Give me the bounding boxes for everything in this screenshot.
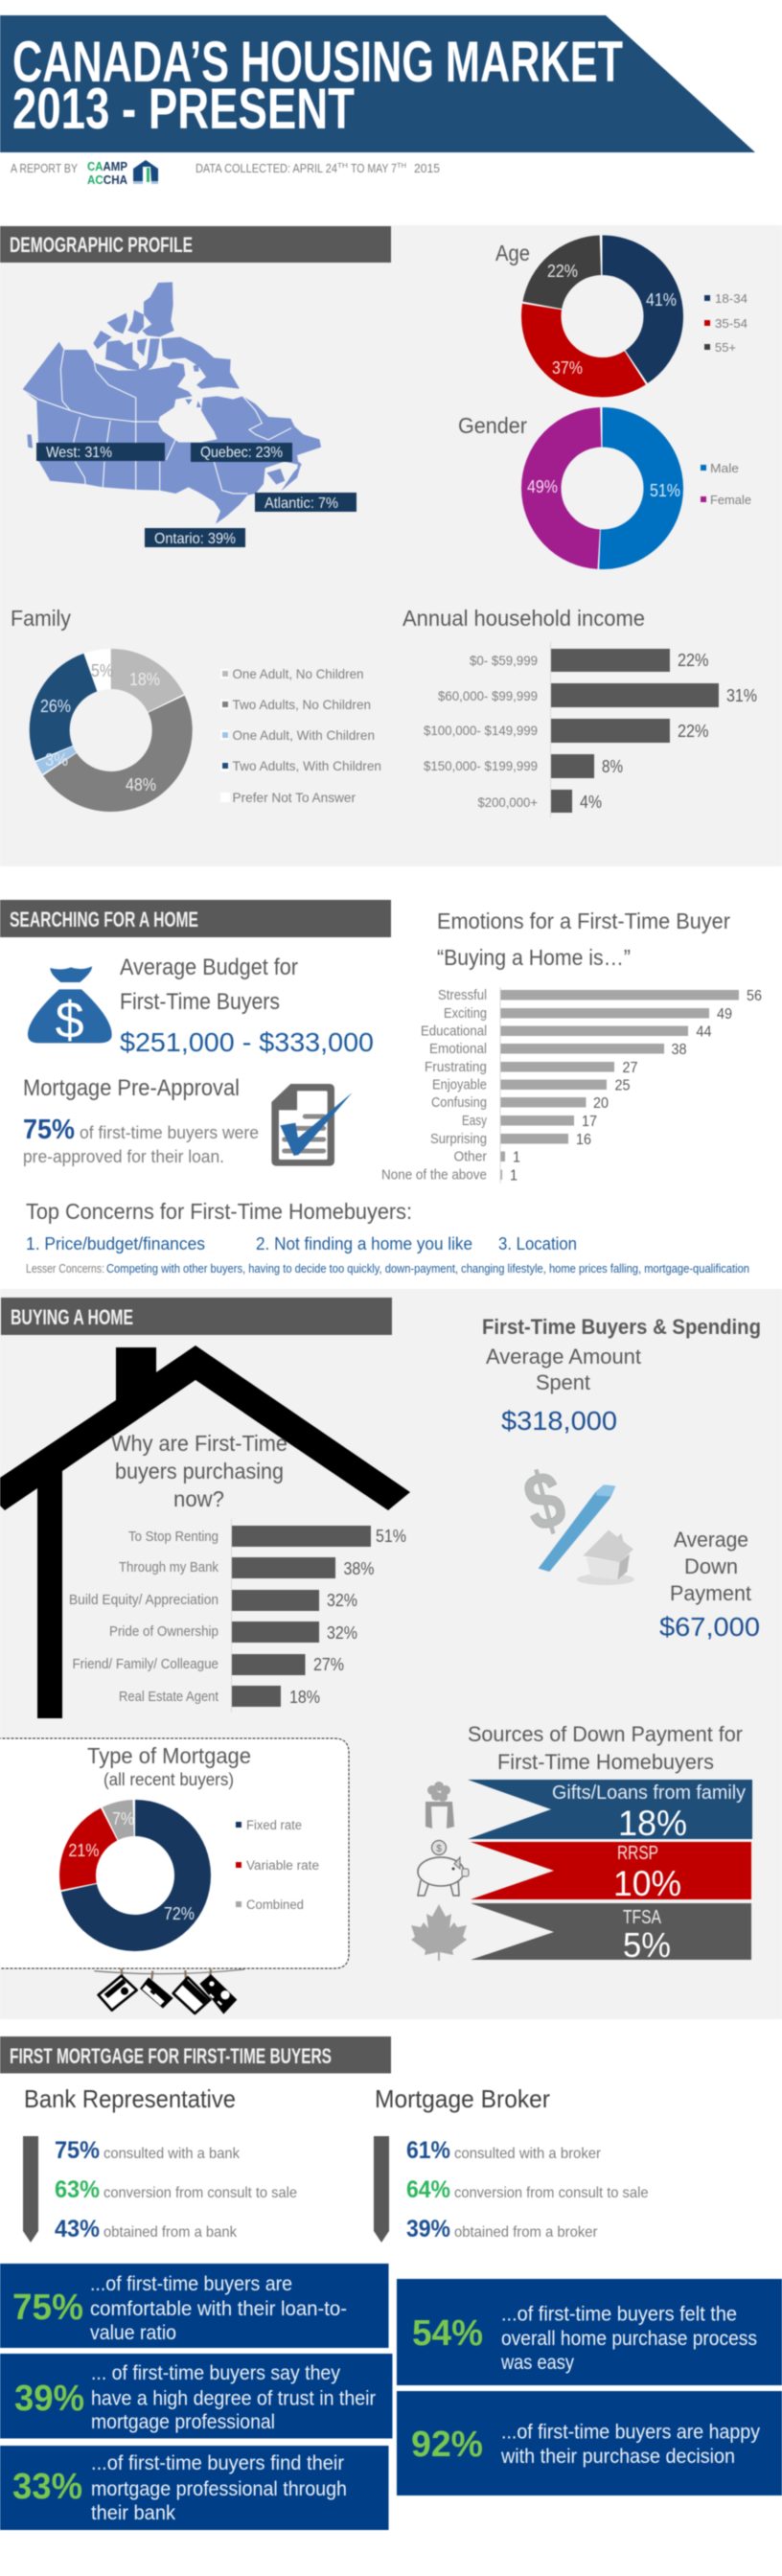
heading: searching for a home: SEARCHING FOR A HOME [10,908,198,932]
emotions bar chart: None of the above [381,1167,487,1183]
heading: emotions: “Buying a Home is…” [437,945,631,970]
text: why are first-time buyers purchasing now [111,1431,288,1511]
callout: 75% comfortable: value ratio [90,2322,176,2344]
arrow: broker funnel [374,2136,389,2242]
icon: money bag [28,966,112,1049]
ribbon: RRSP: RRSP [617,1843,658,1864]
emotions bar chart [381,987,762,1184]
income bar chart: $200,000+ [477,794,538,810]
mortgage legend: Combined [246,1898,304,1912]
callout: 54% easy process: overall home purchase process [501,2328,757,2350]
text: first-time buyers and spending: Average Amount [486,1345,641,1368]
report credit line: TO MAY 7 [351,161,397,175]
title: 2013 - PRESENT [12,77,355,141]
icon: dollar percent house: $ [515,1453,574,1550]
mortgage legend [236,1818,319,1912]
family chart: 26% [40,697,71,716]
text: average down payment: Payment [670,1581,751,1605]
reasons bar chart: 18% [289,1688,320,1707]
heading: searching for a home [0,900,391,937]
income bar chart: 4% [580,793,602,812]
gender chart [458,413,751,549]
emotions bar chart: 17 [582,1114,597,1130]
callout: 54% easy process: ...of first-time buyers felt the [501,2304,737,2325]
label: West: West: 31% [46,445,112,461]
mortgage donut chart: 21% [69,1841,100,1860]
callout: 39% trust: 39% [14,2379,84,2419]
callout: 92% happy: 92% [411,2425,483,2465]
age chart [495,241,748,378]
text: top concerns: Lesser Concerns: [26,1262,104,1276]
column: mortgage broker [374,2084,649,2242]
gender chart: 49% [527,477,558,496]
reasons bar chart: Through my Bank [119,1560,219,1576]
emotions bar chart: Other [454,1150,487,1165]
text: first-time buyers and spending: Spent [536,1370,590,1394]
income bar chart: 22% [678,722,709,741]
text: mortgage pre-approval: 75% [23,1115,75,1145]
emotions bar chart: Emotional [429,1042,487,1057]
emotions bar chart: Easy [462,1114,488,1129]
reasons bar chart: 51% [376,1527,406,1546]
title [12,30,623,141]
family chart: 48% [126,775,156,794]
text: top concerns: 1. Price/budget/finances [26,1234,205,1254]
bank statistics: obtained from a bank [104,2224,238,2241]
reasons bar chart: Build Equity/ Appreciation [69,1593,218,1608]
ribbon: RRSP: 10% [613,1864,681,1903]
income bar chart: $0- $59,999 [470,653,538,668]
gender legend: Female [710,493,751,507]
emotions bar chart: 49 [717,1006,732,1023]
reasons bar chart: 32% [327,1623,357,1643]
broker statistics: consulted with a broker [454,2146,602,2162]
broker statistics: conversion from consult to sale [454,2185,649,2201]
icon: document with check mark [271,1084,353,1166]
callout: 39% trust: ... of first-time buyers say they [91,2362,340,2384]
icon: gift [426,1782,454,1828]
icon: house outline [0,1346,410,1718]
callout: 39% trust: have a high degree of trust in their [91,2388,376,2409]
panel: demographic profile [0,225,782,866]
callout: 75% comfortable: comfortable with their loan-to- [90,2298,347,2320]
logo: CAAMP ACCHA: CAAMP [87,159,127,173]
icon: dollar percent house [515,1453,634,1585]
family chart: Family [11,606,71,631]
emotions bar chart: Exciting [444,1006,487,1022]
age legend: 35-54 [715,316,748,331]
emotions bar chart: Enjoyable [432,1077,487,1092]
text: mortgage pre-approval [23,1075,259,1166]
mortgage legend: Variable rate [246,1858,319,1873]
icon: maple leaf [411,1904,467,1961]
gender legend: Male [710,461,739,475]
emotions bar chart: 20 [593,1095,609,1112]
ribbon: gifts and loans from family: Gifts/Loans from family [552,1782,746,1804]
text: top concerns [26,1199,749,1276]
gender chart: Gender [458,413,527,438]
panel: type of mortgage: (all recent buyers) [104,1770,234,1789]
text: top concerns: Top Concerns for First-Time Homebuyers: [26,1199,412,1224]
callout: 39% trust: mortgage professional [91,2411,275,2433]
family legend: One Adult, With Children [232,727,375,743]
text: average budget: $251,000 - $333,000 [120,1027,374,1057]
arrow: bank funnel [23,2136,38,2242]
family legend: One Adult, No Children [232,666,364,681]
emotions bar chart: 27 [623,1060,638,1076]
text: first-time buyers and spending: First-Time Buyers & Spending [482,1315,761,1339]
age legend: 18-34 [715,291,748,306]
mortgage donut chart: 72% [164,1904,195,1923]
text: average budget: Average Budget for [120,954,298,980]
text: mortgage pre-approval: pre-approved for their loan. [23,1147,224,1166]
broker statistics: 61% [406,2137,450,2164]
ribbon: TFSA [471,1903,751,1965]
heading: sources of down payment: First-Time Homebuyers [497,1750,714,1774]
emotions bar chart: 56 [747,988,762,1004]
heading: sources of down payment [468,1722,743,1774]
ribbon: TFSA: TFSA [623,1907,662,1928]
callout: 75% comfortable: ...of first-time buyers are [90,2273,292,2295]
label: Quebec: Quebec: 23% [200,445,283,461]
emotions bar chart: Surprising [430,1132,487,1147]
reasons bar chart: 38% [343,1559,374,1578]
reasons bar chart: Real Estate Agent [119,1690,218,1705]
logo: CAAMP ACCHA: ACCHA [87,172,128,187]
income bar chart: Annual household income [402,606,645,631]
callout: 92% happy: with their purchase decision [500,2446,735,2468]
bank statistics: 43% [55,2216,100,2242]
emotions bar chart: Educational [421,1024,487,1039]
report credit line [11,161,440,175]
bank statistics: 75% [55,2137,100,2164]
callout: 39% trust [0,2354,393,2438]
text: average budget [120,954,374,1057]
reasons bar chart: To Stop Renting [128,1530,218,1545]
report credit line: TH [397,163,406,170]
heading: first mortgage: FIRST MORTGAGE FOR FIRST-TIME BUYERS [10,2044,332,2068]
gender legend [701,461,751,507]
panel: buying a home [0,1289,782,2019]
province borders [22,350,291,494]
reasons bar chart: 32% [327,1591,357,1610]
emotions bar chart: 25 [615,1077,631,1094]
report credit line: A REPORT BY [11,161,78,175]
emotions bar chart: Stressful [438,988,487,1003]
callout: 54% easy process: 54% [412,2313,483,2354]
column: bank representative [23,2084,297,2242]
logo: CAAMP ACCHA [87,159,158,187]
text: average down payment: $67,000 [659,1612,760,1642]
broker statistics: 64% [406,2176,450,2203]
emotions bar chart: 1 [513,1150,520,1165]
report credit line: 2015 [414,161,440,175]
text: mortgage pre-approval: of first-time buyers were [80,1123,259,1142]
ribbon: TFSA: 5% [623,1925,671,1965]
callout: 54% easy process [397,2279,782,2385]
mortgage donut chart: 7% [112,1809,134,1828]
text: first-time buyers and spending: $318,000 [501,1406,617,1436]
heading: first mortgage [0,2036,391,2074]
ribbon: gifts and loans from family [468,1780,752,1843]
header banner [0,15,755,152]
callout: 75% comfortable: 75% [12,2288,83,2328]
callout: 33% through their bank: their bank [91,2502,175,2524]
panel: first mortgage for first-time buyers [0,2036,782,2530]
heading: buying a home [1,1298,392,1335]
heading: emotions [437,908,730,970]
icon: piggy bank [418,1840,469,1896]
emotions bar chart: 16 [576,1132,591,1148]
icon: piggy bank: $ [436,1844,442,1854]
reasons bar chart: Pride of Ownership [109,1624,218,1640]
income bar chart: 31% [726,686,757,705]
text: average down payment [659,1528,760,1642]
text: top concerns: 2. Not finding a home you like [256,1234,472,1254]
broker statistics: obtained from a broker [454,2224,598,2241]
income bar chart: 8% [602,757,623,776]
column: mortgage broker: Mortgage Broker [375,2084,550,2113]
age legend: 55+ [715,340,736,355]
emotions bar chart: Confusing [431,1095,487,1111]
income bar chart [402,606,757,817]
income bar chart: $150,000- $199,999 [424,758,538,773]
family legend [220,666,381,805]
text: why are first-time buyers purchasing now: buyers purchasing [115,1459,284,1484]
bank statistics: 63% [55,2176,100,2203]
callout: 33% through their bank [0,2446,389,2530]
panel: searching for a home [0,900,762,1276]
age chart: 22% [547,262,578,281]
reasons bar chart: 27% [313,1655,344,1674]
label: Atlantic: Atlantic: 7% [264,495,338,512]
age legend [704,291,748,355]
age chart: 37% [552,358,583,378]
bank statistics [55,2137,297,2242]
text: why are first-time buyers purchasing now: now? [173,1486,224,1511]
callout: 54% easy process: was easy [500,2352,574,2374]
callout: 92% happy: ...of first-time buyers are happy [501,2421,760,2444]
heading: sources of down payment: Sources of Down Payment for [468,1722,743,1746]
report credit line: DATA COLLECTED: APRIL 24 [196,161,337,175]
broker statistics: 39% [406,2216,450,2242]
label: Atlantic [255,493,356,512]
age chart: Age [495,241,530,265]
family chart: 5% [91,661,113,680]
income bar chart: 22% [678,651,709,670]
label: West [36,443,165,461]
callout: 75% comfortable [0,2264,389,2348]
income bar chart: $60,000- $99,999 [438,688,538,703]
icon: hanging credit cards [94,1968,244,2014]
mortgage donut chart [69,1809,195,1933]
emotions bar chart: 44 [696,1024,712,1041]
callout: 92% happy [397,2391,782,2496]
family legend: Two Adults, No Children [232,697,371,712]
text: average budget: First-Time Buyers [120,989,280,1015]
emotions bar chart: 1 [510,1167,518,1184]
text: average down payment: Down [684,1554,738,1578]
bank statistics: conversion from consult to sale [104,2185,297,2201]
broker statistics [406,2137,649,2242]
text: mortgage pre-approval: Mortgage Pre-Approval [23,1075,240,1101]
heading: demographic profile [0,226,391,263]
ribbon: RRSP [471,1842,751,1903]
column: bank representative: Bank Representative [24,2084,236,2113]
callout: 33% through their bank: mortgage professional through [91,2478,347,2500]
panel: type of mortgage: Type of Mortgage [87,1743,251,1768]
family legend: Prefer Not To Answer [232,790,356,805]
heading: emotions: Emotions for a First-Time Buyer [437,908,730,933]
heading: demographic profile: DEMOGRAPHIC PROFILE [10,233,193,257]
family chart: 3% [45,750,68,770]
family legend: Two Adults, With Children [232,758,381,773]
family chart [11,606,381,805]
heading: buying a home: BUYING A HOME [11,1305,133,1329]
text: average down payment: Average [674,1528,748,1552]
income bar chart: $100,000- $149,999 [424,723,538,738]
text: first-time buyers and spending [482,1315,761,1436]
bank statistics: consulted with a bank [104,2146,241,2162]
family chart: 18% [129,670,160,689]
text: why are first-time buyers purchasing now: Why are First-Time [111,1431,288,1456]
ribbon: gifts and loans from family: 18% [618,1804,687,1843]
reasons bar chart [69,1519,406,1713]
callout: 33% through their bank: 33% [12,2467,82,2507]
emotions bar chart: 38 [671,1042,687,1058]
icon: money bag: $ [56,992,84,1049]
age chart: 41% [646,290,677,310]
callout: 33% through their bank: ...of first-time buyers find their [91,2452,344,2474]
panel: type of mortgage [0,1738,349,1968]
mortgage legend: Fixed rate [246,1818,302,1832]
reasons bar chart: Friend/ Family/ Colleague [73,1657,218,1672]
text: top concerns: 3. Location [498,1234,577,1254]
emotions bar chart: Frustrating [425,1060,487,1075]
map of Canada [22,282,356,547]
report credit line: TH [337,163,348,170]
label: Ontario: Ontario: 39% [154,531,236,547]
gender chart: 51% [650,481,680,500]
